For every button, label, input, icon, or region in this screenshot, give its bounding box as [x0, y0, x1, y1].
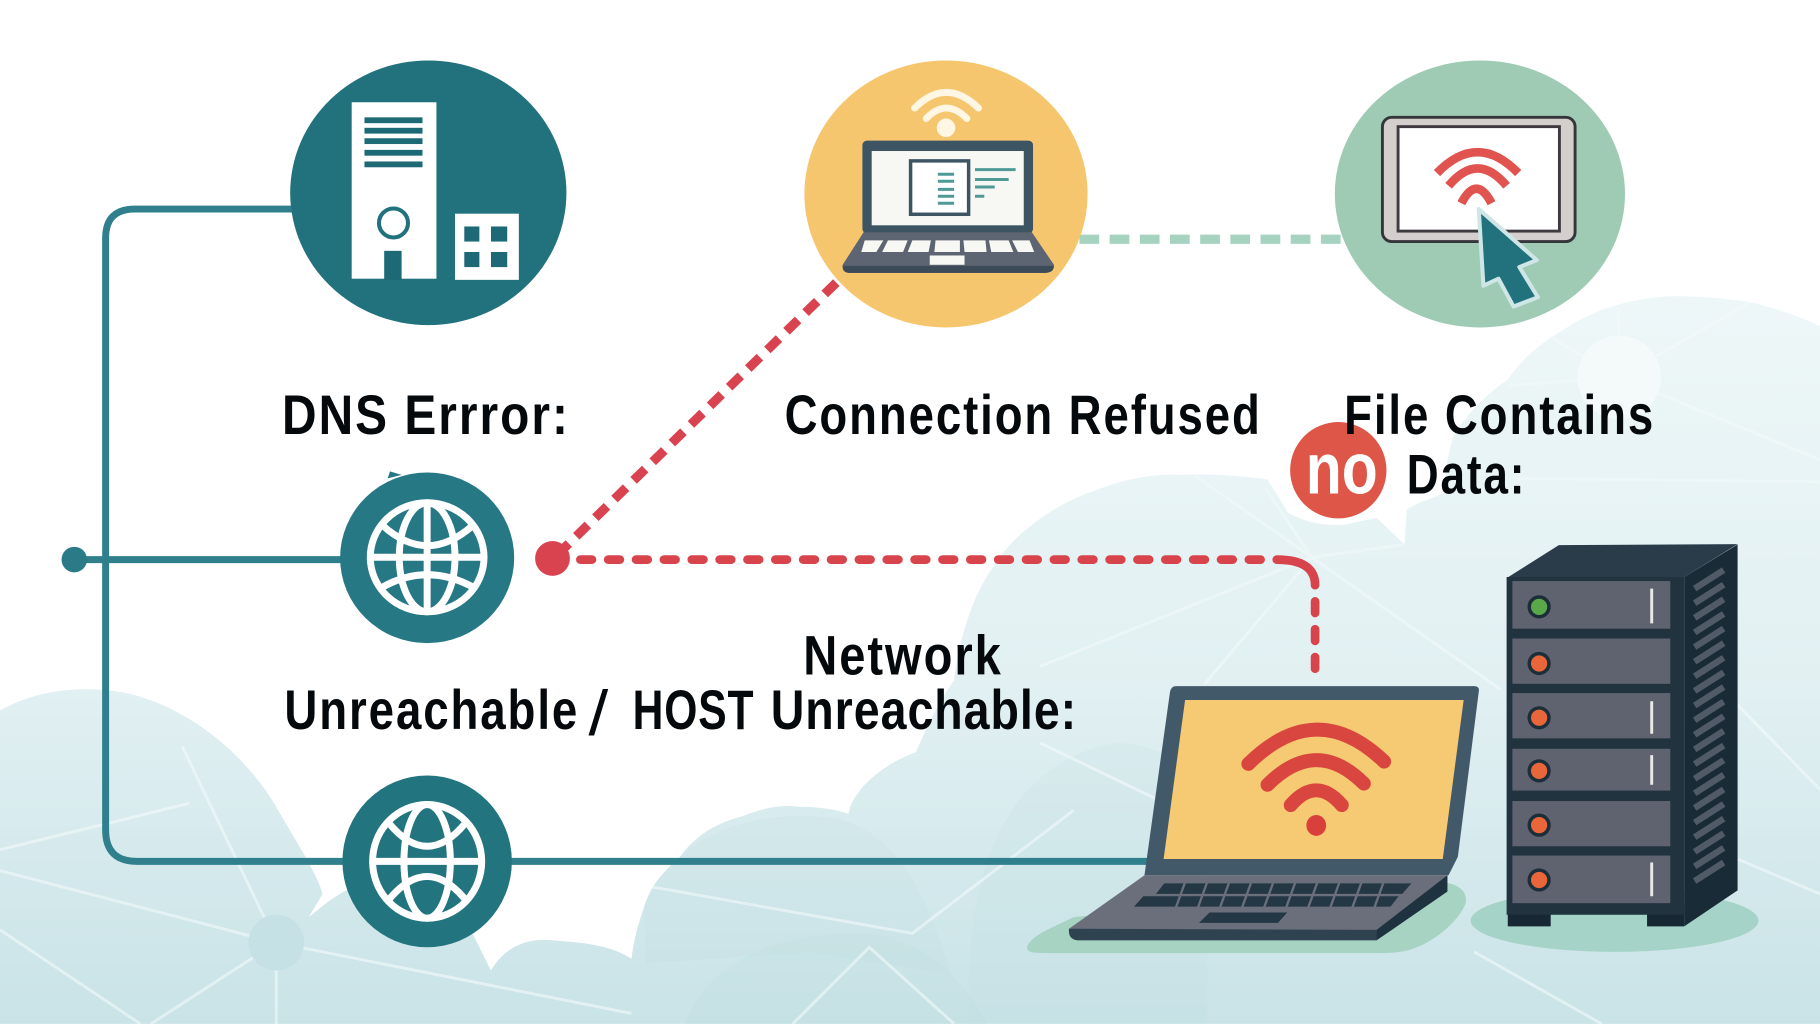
- heading: Network Unreachable / Host Unreachable: Unreachable:: [771, 679, 1077, 741]
- heading: Connection Refused: Connection Refused: [785, 384, 1262, 446]
- icon: DNS server building: [290, 60, 566, 325]
- badge: no: no: [1306, 429, 1378, 509]
- heading: Network Unreachable / Host Unreachable: HOST: [633, 679, 754, 741]
- heading: File Contains Data: [1344, 384, 1655, 505]
- heading: Network Unreachable / Host Unreachable: Network: [803, 625, 1003, 687]
- icon: laptop with wifi on amber circle: [804, 60, 1088, 327]
- red dashed connectors: [535, 279, 1315, 676]
- green dashed connector: [1079, 235, 1346, 243]
- heading: File Contains Data: Data:: [1407, 443, 1526, 505]
- icon: server rack: [1471, 544, 1758, 952]
- heading: Network Unreachable / Host Unreachable: /: [588, 679, 609, 749]
- heading: Network Unreachable / Host Unreachable: [284, 624, 1077, 749]
- icon: globe lower: [342, 775, 512, 947]
- heading: File Contains Data: File Contains: [1344, 384, 1655, 446]
- badge: no: [1290, 422, 1386, 518]
- icon: tablet with cursor on green circle: [1335, 60, 1625, 327]
- icon: globe upper: [340, 471, 514, 643]
- icon: large laptop with wifi: [1027, 686, 1479, 953]
- background: cloud network: [0, 296, 1820, 1024]
- heading: DNS Error: DNS Errror:: [282, 384, 570, 446]
- teal connector lines: [62, 209, 1167, 861]
- heading: Network Unreachable / Host Unreachable: Unreachable: [284, 679, 579, 741]
